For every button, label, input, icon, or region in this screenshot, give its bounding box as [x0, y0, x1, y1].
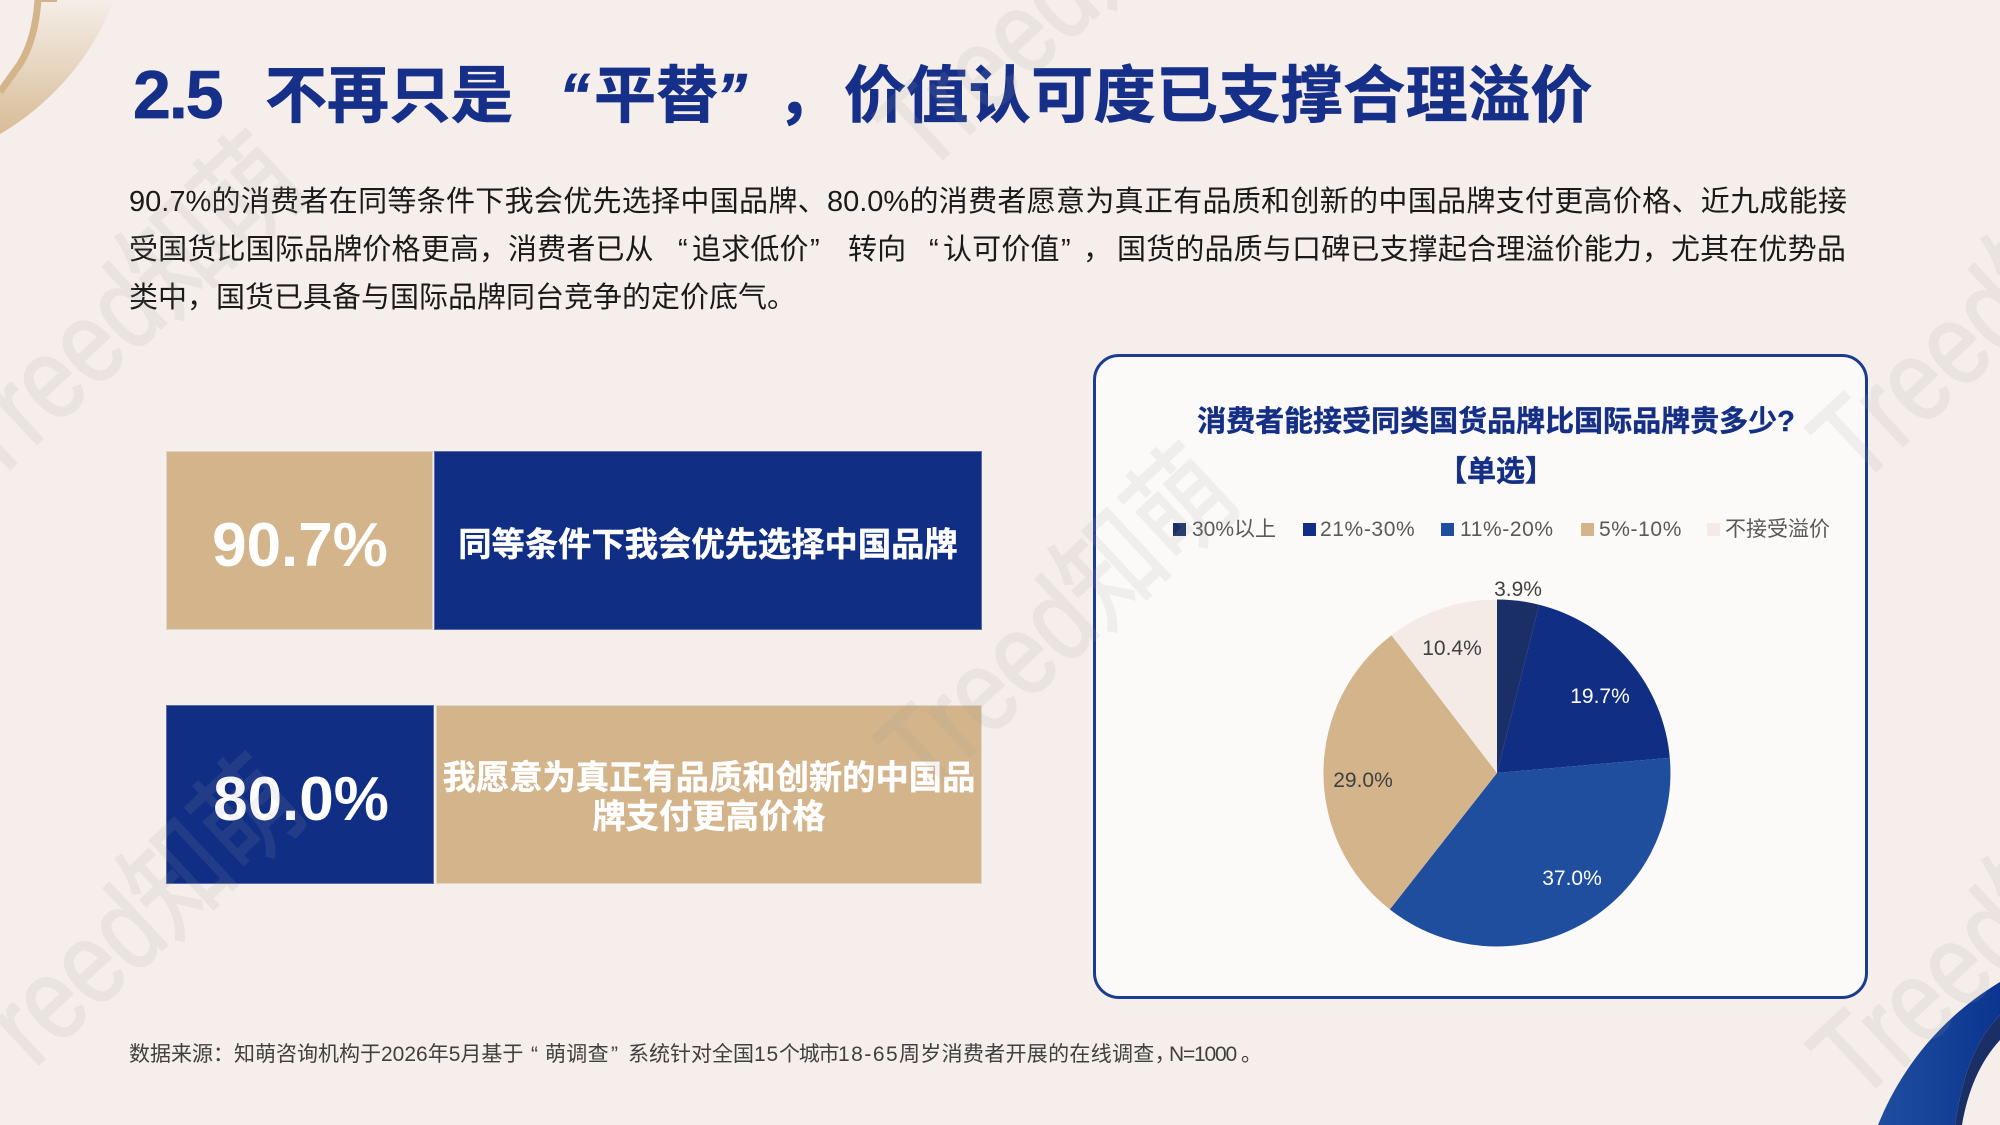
stat card: 90.7% — [166, 451, 982, 630]
title: ” — [716, 62, 747, 131]
chart title — [1197, 406, 1795, 488]
intro paragraph: 追求低价 — [692, 234, 809, 266]
source note: 系统针对全国 — [628, 1043, 754, 1066]
intro paragraph: 90.7%的消费者在同等条件下我会优先选择中国品牌、80.0%的消费者愿意为真正有品质和创新的中国品牌支付更高价格、近九成能接 — [129, 186, 1847, 218]
watermarks: Treed知萌 — [853, 424, 1260, 816]
stat 90.7% description — [434, 451, 982, 630]
pie labels — [1333, 578, 1630, 890]
title: “ — [559, 62, 590, 131]
stat 90.7% description: 同等条件下我会优先选择中国品牌 — [458, 527, 958, 564]
intro paragraph: ” — [1061, 234, 1071, 266]
title: 2.5 — [133, 57, 222, 133]
intro paragraph — [129, 186, 1847, 314]
title: 不再只是 — [265, 62, 513, 131]
intro paragraph: “ — [678, 234, 688, 266]
intro paragraph: 尤其在优势品 — [1671, 234, 1846, 266]
legend: 11%-20% — [1460, 518, 1554, 541]
source note: N=1000 — [1169, 1043, 1236, 1066]
pie labels: 37.0% — [1542, 867, 1602, 890]
intro paragraph: 认可价值 — [943, 234, 1060, 266]
pie labels: 29.0% — [1333, 769, 1393, 792]
source note: ” — [611, 1043, 618, 1066]
legend: 30%以上 — [1192, 518, 1276, 541]
intro paragraph: 受国货比国际品牌价格更高， — [129, 234, 508, 266]
stat 80.0% tile: 80.0% — [213, 765, 389, 834]
pie labels: 3.9% — [1494, 578, 1542, 601]
intro paragraph: ， — [1083, 234, 1112, 266]
title — [133, 57, 1593, 133]
source note: 。 — [1241, 1043, 1262, 1066]
decoration: blue corner curve — [1878, 982, 2000, 1125]
title: 平替 — [594, 62, 718, 131]
source note: 周岁消费者开展的在线调查， — [899, 1043, 1176, 1066]
stat 80.0% description: 我愿意为真正有品质和创新的中国品 — [443, 760, 975, 797]
source note: 萌调查 — [545, 1043, 609, 1066]
source note: 18-65 — [838, 1043, 899, 1066]
intro paragraph: “ — [929, 234, 939, 266]
source note: 数据来源：知萌咨询机构于2026年5月基于 — [129, 1043, 523, 1066]
intro paragraph: ” — [810, 234, 820, 266]
legend: 不接受溢价 — [1725, 518, 1830, 541]
stat card: 80.0% — [166, 705, 982, 884]
chart title: 【单选】 — [1438, 456, 1554, 488]
title: ， — [777, 62, 839, 131]
source note: 15 — [754, 1043, 779, 1066]
legend — [1173, 518, 1830, 541]
legend: 5%-10% — [1599, 518, 1682, 541]
chart title: 消费者能接受同类国货品牌比国际品牌贵多少? — [1197, 406, 1795, 438]
source note — [129, 1042, 1262, 1066]
stat 80.0% description — [436, 705, 982, 884]
panel: pie chart card — [1093, 354, 1868, 999]
pie labels: 19.7% — [1570, 685, 1630, 708]
stat 80.0% tile — [166, 705, 434, 884]
intro paragraph: 消费者已从 — [508, 234, 654, 266]
title: 价值认可度已支撑合理溢价 — [844, 62, 1593, 131]
intro paragraph: 类中，国货已具备与国际品牌同台竞争的定价底气。 — [129, 282, 796, 314]
stat 90.7% tile — [166, 451, 433, 630]
stat 90.7% tile: 90.7% — [212, 511, 388, 580]
intro paragraph: 国货的品质与口碑已支撑起合理溢价能力， — [1117, 234, 1671, 266]
pie chart — [1324, 600, 1670, 946]
intro paragraph: 转向 — [848, 234, 906, 266]
legend: 21%-30% — [1320, 518, 1415, 541]
decoration: gold corner curve — [0, 0, 110, 134]
stat 80.0% description: 牌支付更高价格 — [592, 799, 826, 836]
pie labels: 10.4% — [1422, 637, 1482, 660]
source note: 个城市 — [779, 1043, 838, 1066]
source note: “ — [531, 1043, 538, 1066]
watermarks: T — [1786, 987, 1917, 1122]
